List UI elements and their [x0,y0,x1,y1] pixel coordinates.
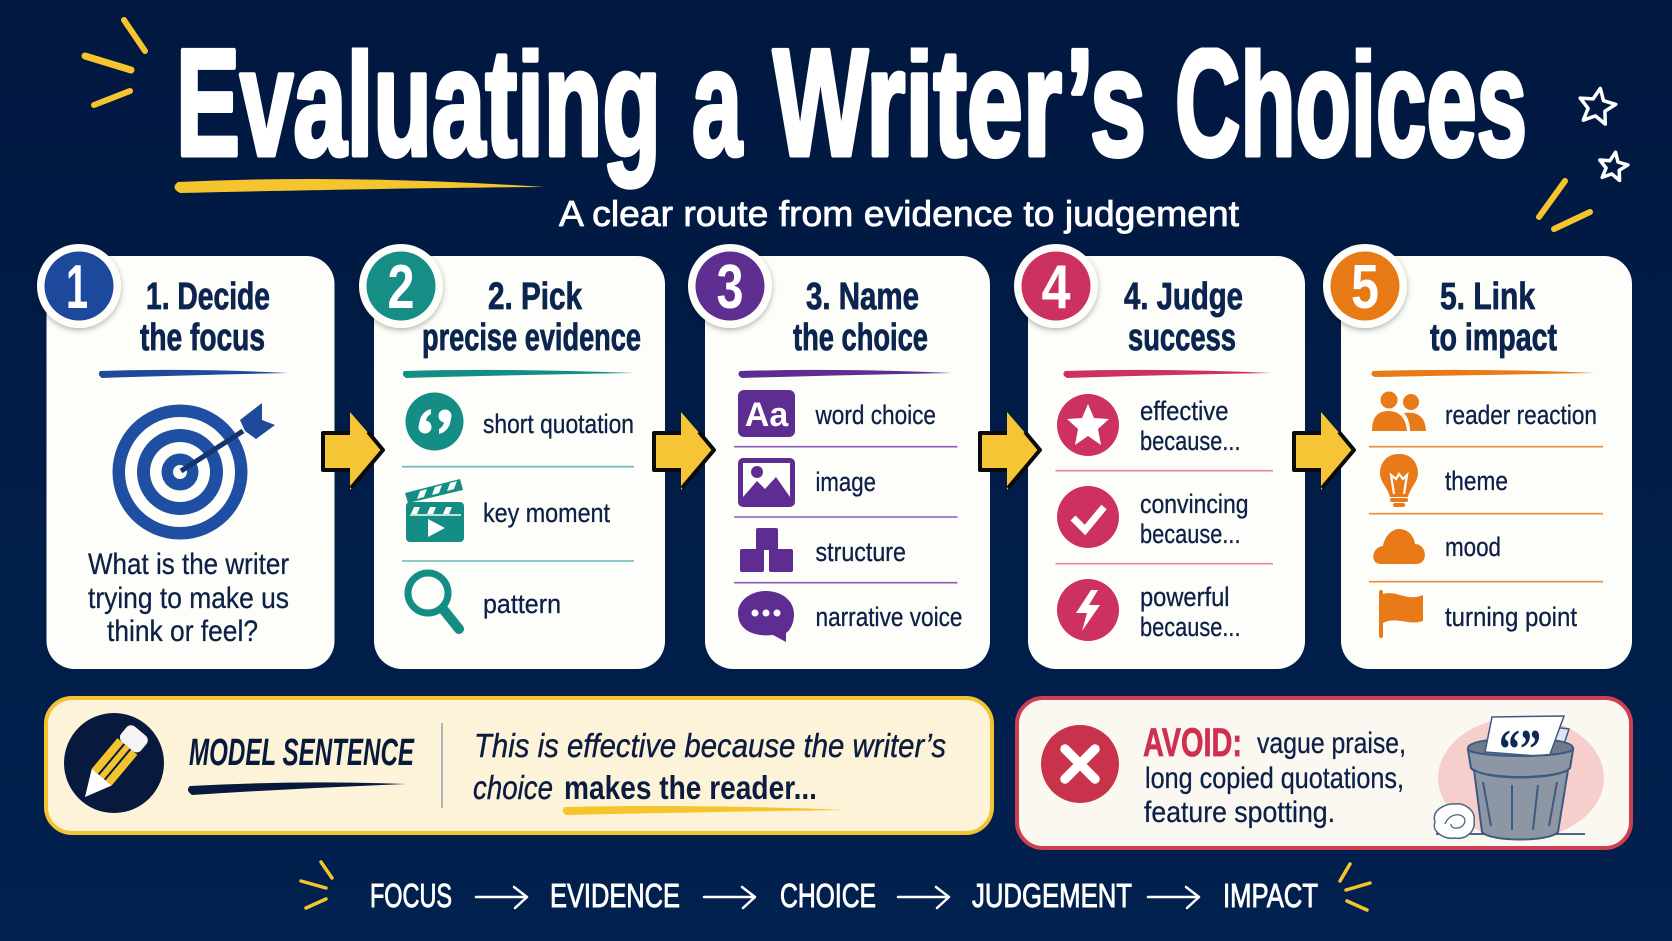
icon: pencil [64,713,164,813]
title: a [692,18,743,188]
icon: lightbulb [1380,454,1418,507]
heading underline [738,370,952,378]
footer route: JUDGEMENT [972,877,1132,914]
model sentence text: choice [473,769,553,806]
question text: What is the writer [88,548,289,581]
item text: short quotation [483,409,634,439]
icon: structure blocks [740,528,793,572]
heading [793,276,928,359]
heading: 3. Name [806,276,919,318]
item text: mood [1445,532,1501,562]
avoid text: vague praise, [1257,727,1406,760]
step badge 2: 2 [388,253,414,322]
heading: the choice [793,317,928,359]
footer route: FOCUS [370,877,452,914]
icon: flag [1379,590,1423,638]
yellow underline [563,806,846,815]
icon: quotation [406,392,464,450]
question text: trying to make us [88,582,289,615]
model sentence text: This is effective because the writer’s [474,727,946,764]
arrow: step 2 to 3 [654,412,714,490]
item text: key moment [483,498,610,528]
icon: Aa [738,390,795,437]
step badge 1 [37,244,121,328]
footer route [370,877,1318,914]
panel: step 3 name the choice [688,244,990,669]
item text: theme [1445,466,1508,496]
decorative sparks: top right [1539,181,1590,229]
panel: model sentence [46,698,992,833]
item text: powerful [1140,582,1230,612]
decorative sparks: top left [85,20,145,105]
heading: 1. Decide [146,276,270,318]
question text: think or feel? [107,615,258,648]
heading underline [99,370,288,378]
item text: reader reaction [1445,400,1597,430]
icon: lightning [1057,579,1119,641]
heading [422,276,641,359]
heading: success [1128,317,1236,359]
arrow: step 4 to 5 [1294,412,1354,490]
title: Evaluating [176,18,661,188]
decorative sparks: footer right [1340,864,1370,910]
arrow [476,887,527,908]
label underline [188,782,406,795]
arrow: step 3 to 4 [980,412,1040,490]
subtitle: A clear route from evidence to judgement [559,193,1239,234]
item text: because... [1140,612,1240,642]
item text [1140,489,1248,549]
step badge 5 [1323,244,1407,328]
arrow [898,887,949,908]
avoid text: long copied quotations, [1145,762,1404,795]
icon: star [1057,394,1119,456]
question text [88,548,289,648]
icon: trash can with quotation: “” [1499,719,1541,781]
icon: Aa: Aa [745,396,789,434]
footer route: IMPACT [1223,877,1318,914]
icon: stars [1580,88,1628,180]
heading [1430,276,1557,359]
icon: cloud [1373,529,1425,564]
avoid text: feature spotting. [1144,796,1335,829]
icon: speech bubble [738,591,794,642]
avoid text [1143,721,1406,829]
item text: structure [816,537,906,567]
step badge 3: 3 [716,253,744,322]
decorative sparks: footer left [301,862,332,908]
item text [1140,396,1240,456]
heading [140,276,270,359]
panel: step 2 pick precise evidence [359,244,665,669]
heading underline [1063,370,1271,378]
item text: pattern [483,589,561,619]
heading: to impact [1430,317,1557,359]
model sentence label: MODEL SENTENCE [189,732,415,774]
icon: target with arrow [112,403,275,540]
item text: image [816,467,876,497]
panel: step 5 link to impact [1323,244,1632,669]
heading: precise evidence [422,317,641,359]
model sentence text [473,727,946,806]
footer route: EVIDENCE [550,877,680,914]
heading: 2. Pick [488,276,583,318]
step badge 2 [359,244,443,328]
heading: the focus [140,317,265,359]
heading: 4. Judge [1124,276,1243,318]
icon: check [1057,486,1119,548]
icon: clapperboard [405,479,464,542]
item text: narrative voice [816,602,962,632]
item text: word choice [815,400,936,430]
panel: step 4 judge success [1014,244,1305,669]
item text: effective [1140,396,1228,426]
step badge 5: 5 [1351,253,1379,322]
heading: 5. Link [1440,276,1536,318]
arrow [1148,887,1199,908]
item text [1140,582,1240,642]
item text: because... [1140,519,1240,549]
item text: because... [1140,426,1240,456]
model sentence text: makes the reader... [564,769,817,806]
heading underline [403,370,634,378]
arrow [704,887,755,908]
title underline [174,179,544,193]
step badge 1: 1 [66,253,88,322]
footer route: CHOICE [780,877,876,914]
arrow: step 1 to 2 [323,412,383,490]
icon: magnifier [408,573,459,629]
step badge 3 [688,244,772,328]
panel: avoid [1017,698,1631,848]
title [180,48,1525,190]
panel: step 1 decide the focus [37,244,334,669]
item text: convincing [1140,489,1248,519]
step badge 4 [1014,244,1098,328]
icon: people [1372,392,1426,431]
title: Writer’s [773,18,1146,188]
icon: cross [1041,725,1119,803]
icon: image [738,458,795,507]
heading underline [1371,370,1595,377]
avoid text: AVOID: [1143,721,1242,765]
icon: trash can with quotation [1434,716,1604,840]
step badge 4: 4 [1042,253,1071,322]
heading [1124,276,1243,359]
item text: turning point [1445,602,1577,632]
